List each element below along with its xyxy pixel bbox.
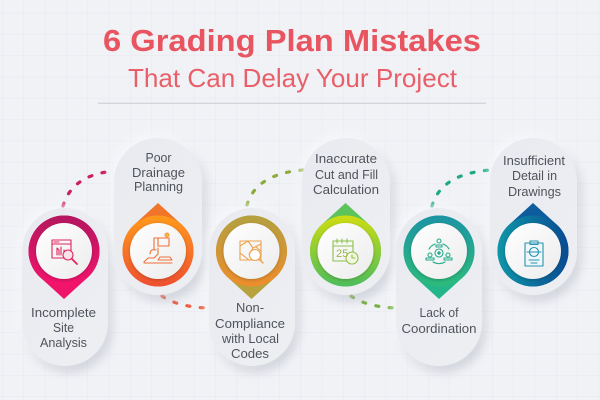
title: 6 Grading Plan Mistakes	[103, 23, 481, 58]
pin marker 2	[122, 203, 194, 286]
panel: incomplete site analysis	[22, 208, 108, 366]
arrow: dashed connector 1 to 2	[63, 172, 110, 206]
panel: inaccurate cut and fill calculation	[302, 138, 390, 295]
pin marker 6	[498, 203, 568, 286]
arrow: dashed connector 4 to 5	[351, 296, 396, 308]
label	[31, 305, 96, 350]
label: Drawings	[508, 184, 561, 199]
label: Detail in	[512, 168, 557, 183]
label: Calculation	[313, 182, 379, 197]
panel: poor drainage planning	[114, 138, 202, 295]
label: Lack of	[420, 305, 459, 320]
pin marker 1	[28, 216, 99, 299]
label	[215, 300, 285, 361]
title	[103, 23, 481, 93]
icon: calendar with clock: 25	[336, 248, 348, 260]
label: Non-	[236, 300, 264, 315]
label: Insufficient	[503, 153, 565, 168]
label	[313, 151, 379, 197]
pin marker 4	[310, 203, 381, 286]
icon: calendar with clock	[333, 239, 358, 264]
label: Codes	[231, 346, 270, 361]
label: Incomplete	[31, 305, 96, 320]
arrow: dashed connector 3 to 4	[247, 170, 303, 205]
label: Planning	[134, 179, 183, 194]
label	[132, 150, 185, 194]
icon: map with magnifier	[240, 241, 263, 263]
label: Drainage	[132, 165, 185, 180]
title: That Can Delay Your Project	[128, 63, 458, 93]
panel: insufficient detail in drawings	[490, 138, 577, 295]
panel: lack of coordination	[396, 208, 482, 366]
label: Poor	[146, 150, 172, 165]
icon: browser with magnifier	[52, 240, 77, 264]
label: Compliance	[215, 316, 285, 331]
panel: non-compliance with local codes	[209, 208, 295, 366]
label	[503, 153, 565, 199]
arrow: dashed connector 2 to 3	[162, 296, 208, 308]
label	[402, 305, 476, 336]
pin marker 3	[216, 216, 287, 299]
pin marker 5	[404, 216, 474, 299]
icon: clipboard	[525, 241, 543, 266]
label: with Local	[221, 331, 279, 346]
label: Analysis	[40, 335, 87, 350]
icon: drainage works	[144, 233, 172, 263]
label: Site	[53, 320, 74, 335]
label: Coordination	[402, 321, 476, 336]
arrow: dashed connector 5 to 6	[432, 170, 490, 206]
label: Inaccurate	[315, 151, 377, 166]
label: Cut and Fill	[315, 167, 378, 182]
icon: team circle	[426, 239, 452, 264]
